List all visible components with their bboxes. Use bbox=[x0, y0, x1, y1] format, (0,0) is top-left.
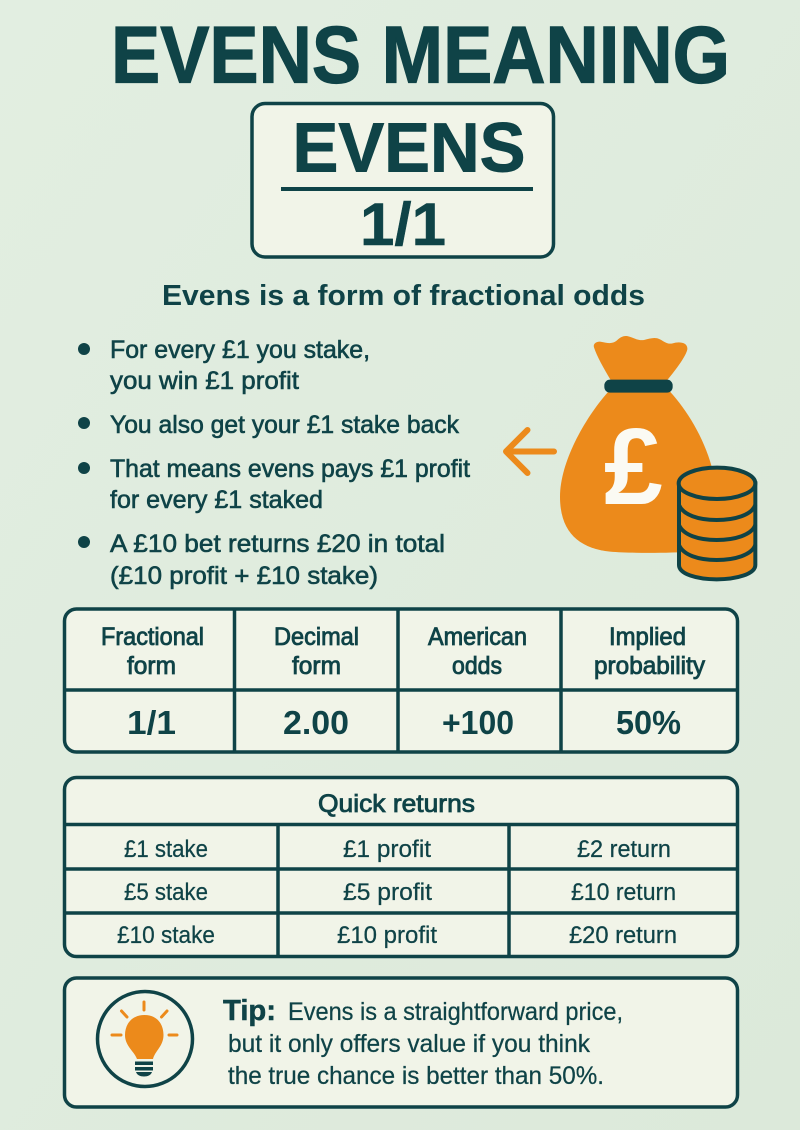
subtitle: Evens is a form of fractional odds bbox=[162, 280, 645, 312]
panel: odds formats table: Decimal bbox=[274, 623, 359, 651]
panel: quick returns table: £10 stake bbox=[117, 922, 215, 949]
panel: quick returns table: £20 return bbox=[569, 922, 677, 949]
panel: quick returns table: £1 stake bbox=[124, 836, 208, 863]
panel: odds formats table: American bbox=[428, 623, 527, 651]
panel: tip callout: Tip: bbox=[223, 995, 276, 1027]
bullet list: you win £1 profit bbox=[110, 367, 299, 395]
panel: odds formats table: form bbox=[292, 652, 341, 680]
bullet list: For every £1 you stake, bbox=[110, 336, 370, 364]
panel: evens 1/1 badge bbox=[252, 104, 554, 258]
panel: quick returns table: £5 profit bbox=[343, 879, 432, 906]
panel: quick returns table: £5 stake bbox=[124, 879, 208, 906]
panel: quick returns table: Quick returns bbox=[318, 790, 475, 818]
panel: odds formats table: 1/1 bbox=[127, 704, 176, 741]
panel: quick returns table: £2 return bbox=[577, 836, 671, 863]
panel: odds formats table: Implied bbox=[609, 623, 686, 651]
bullet list: (£10 profit + £10 stake) bbox=[110, 562, 378, 590]
panel: quick returns table: £10 profit bbox=[337, 922, 437, 949]
panel: odds formats table: 2.00 bbox=[283, 704, 349, 741]
panel: quick returns table: £10 return bbox=[571, 879, 676, 906]
icon: arrow pointing left bbox=[506, 430, 554, 473]
bullet list: That means evens pays £1 profit bbox=[110, 455, 470, 483]
panel: odds formats table: probability bbox=[594, 652, 705, 680]
panel: odds formats table: +100 bbox=[442, 704, 514, 741]
icon: light bulb bbox=[98, 992, 192, 1086]
icon: money bag with coins bbox=[560, 336, 755, 579]
bullet list: You also get your £1 stake back bbox=[110, 411, 459, 439]
panel: odds formats table: Fractional bbox=[101, 623, 204, 651]
bullet list: A £10 bet returns £20 in total bbox=[110, 530, 445, 558]
panel: tip callout bbox=[64, 978, 738, 1107]
panel: evens 1/1 badge: EVENS bbox=[292, 108, 526, 186]
icon: money bag with coins: £ bbox=[604, 406, 663, 527]
panel: odds formats table: form bbox=[127, 652, 176, 680]
bullet list bbox=[78, 336, 470, 590]
panel: quick returns table: £1 profit bbox=[343, 836, 431, 863]
panel: odds formats table: 50% bbox=[616, 704, 681, 741]
panel: tip callout: Evens is a straightforward price, bbox=[288, 998, 623, 1026]
panel: odds formats table bbox=[64, 609, 738, 752]
title: EVENS MEANING bbox=[111, 10, 730, 100]
panel: tip callout: but it only offers value if you think bbox=[228, 1030, 590, 1058]
panel: evens 1/1 badge: 1/1 bbox=[360, 191, 446, 258]
panel: tip callout: the true chance is better than 50%. bbox=[228, 1062, 604, 1090]
panel: odds formats table: odds bbox=[452, 652, 502, 680]
bullet list: for every £1 staked bbox=[110, 486, 323, 514]
panel: quick returns table bbox=[64, 778, 738, 956]
